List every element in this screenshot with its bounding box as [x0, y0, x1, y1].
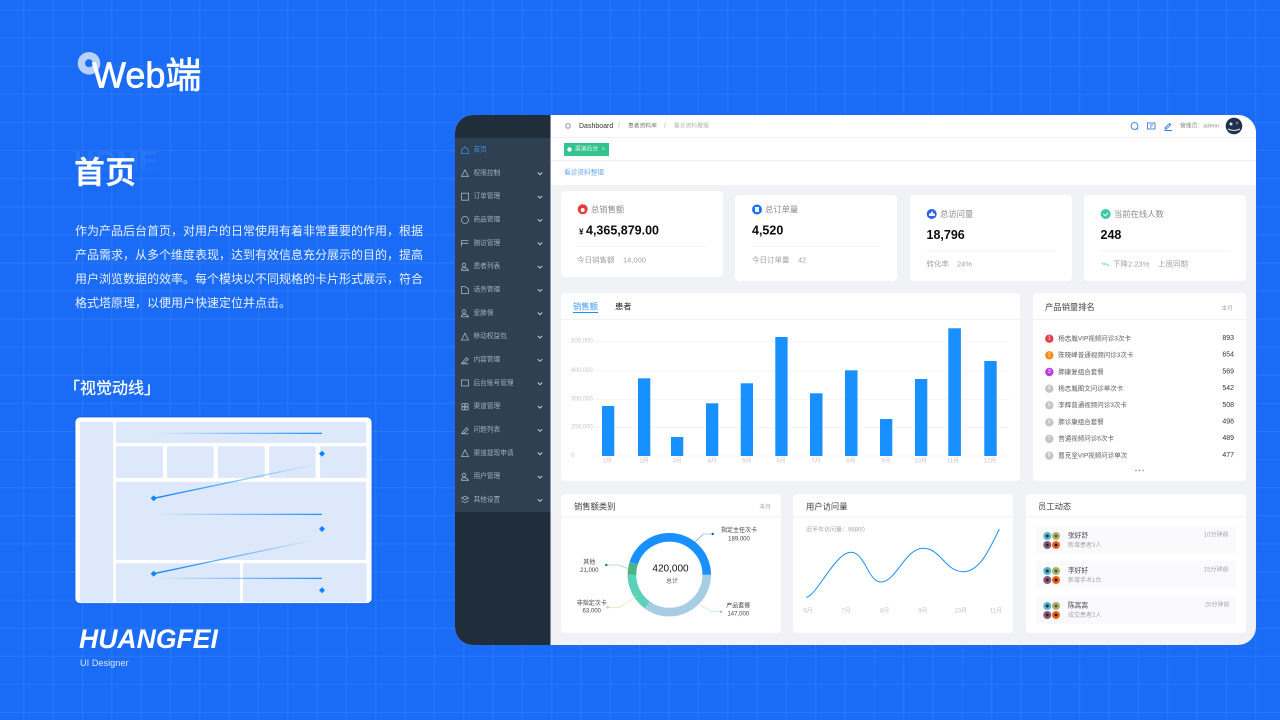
y axis labels: 200,000: [571, 424, 593, 430]
bars: [602, 328, 997, 456]
callout: 产品套餐: 147,000: [727, 612, 750, 618]
nav item: 首页: [462, 144, 487, 154]
rank row 6: 肺诊康组合套餐: [1058, 417, 1104, 426]
rank row 7: 489: [1222, 435, 1234, 442]
x axis labels: 11月: [990, 608, 1002, 615]
panel: sidebar: [455, 115, 550, 645]
panel: sales category donut: 本月: [759, 502, 771, 510]
breadcrumb: Dashboard: [579, 123, 613, 130]
chart tabs: [573, 302, 632, 313]
nav item: 其他设置: 其他设置: [474, 494, 501, 504]
rank row 6: [1045, 417, 1234, 426]
rank row 2: 陈晓峰普通视频问诊3次卡: [1058, 350, 1134, 359]
x axis labels: 9月: [918, 608, 927, 615]
nav item: 随访管理: [461, 239, 542, 246]
x axis labels: 10月: [914, 458, 927, 465]
text block: page description: 产品需求，从多个维度表现，达到有效信息充分展示的目的，提高: [75, 247, 423, 262]
x axis labels: 3月: [672, 458, 682, 465]
rank row 2: 2: [1048, 352, 1051, 358]
callout: 其他: [580, 558, 629, 574]
activity row 3: 成交患者2人: [1068, 611, 1101, 619]
callout: 指定主任次卡: [695, 526, 757, 543]
panel: dashboard mockup: [455, 115, 1256, 645]
icon: online check: [1101, 209, 1111, 219]
callout: 产品套餐: 产品套餐: [726, 602, 750, 610]
icon: orders: [752, 204, 762, 214]
donut chart: [632, 537, 707, 612]
nav item: 问题列表: [462, 424, 542, 434]
activity row 1: 张好舒: [1068, 530, 1088, 540]
rank row 2: 654: [1222, 352, 1234, 358]
rank row 7: [1045, 434, 1234, 443]
x axis labels: 8月: [880, 608, 889, 615]
rank row 8: 477: [1222, 452, 1234, 459]
x axis labels: 12月: [984, 458, 996, 465]
panel: user visits line chart: 近半年访问量：96800: [806, 526, 865, 534]
stat card: 总订单量: 42: [798, 256, 806, 264]
nav item: 商品管理: 商品管理: [474, 214, 501, 224]
icon: dashboard gear: [566, 124, 570, 128]
icon: visits: [927, 209, 937, 219]
rank row 3: 肺康复组合套餐: [1058, 367, 1104, 376]
icon: sales: [578, 204, 588, 214]
nav item: 权限控制: [462, 168, 542, 177]
breadcrumb: [580, 122, 709, 128]
rank row 2: [1045, 350, 1234, 359]
heading: 首页: [74, 146, 158, 190]
nav item: 移动权益包: [462, 331, 542, 340]
donut total: 总计: [666, 577, 678, 585]
rank row 5: 5: [1048, 402, 1051, 408]
rank row 4: 杨志胤图文问诊单次卡: [1058, 384, 1124, 392]
nav item: 订单管理: 订单管理: [474, 191, 501, 200]
avatars: [1043, 567, 1060, 584]
stat card: 当前在线人数: 下降2.23%: [1113, 258, 1150, 268]
callout: 其他: 21,000: [580, 568, 599, 574]
nav item: 爱肺保: 爱肺保: [474, 308, 494, 317]
avatar: admin: [1226, 118, 1242, 134]
chart tabs: 患者: [615, 302, 632, 312]
donut total: 420,000: [652, 564, 689, 574]
rank row 5: 李辉普通视频问诊3次卡: [1058, 400, 1127, 409]
x axis labels: 8月: [846, 458, 856, 465]
rank row 1: 杨志胤VIP视频问诊3次卡: [1058, 334, 1131, 342]
panel: product ranking: 本月: [1221, 304, 1233, 312]
tag: 渠道后台: [564, 143, 609, 156]
heading: 首页: 首页: [74, 156, 136, 190]
text block: page description: 作为产品后台首页，对用户的日常使用有着非常重要的作用，根据: [75, 223, 423, 238]
icon: edit: [1164, 124, 1172, 130]
rank row 5: 508: [1222, 402, 1234, 409]
rank row 3: 3: [1048, 369, 1051, 375]
rank row 6: 498: [1222, 418, 1234, 426]
y axis labels: [571, 339, 593, 459]
nav item: 渠道提现申请: 渠道提现申请: [474, 448, 514, 457]
panel: sales bar chart: [561, 293, 1020, 481]
nav item: 后台账号管理: [461, 379, 542, 386]
x axis labels: [602, 458, 996, 465]
nav item: 用户管理: [462, 471, 542, 480]
tag: 渠道后台: 渠道后台: [575, 144, 598, 152]
rank row 7: 普通视频问诊6次卡: [1058, 434, 1114, 442]
breadcrumb: 看诊资料整理: [674, 122, 709, 130]
more dots: [1135, 470, 1144, 471]
y axis labels: 300,000: [571, 396, 593, 402]
panel: user visits line chart: 用户访问量: [806, 502, 848, 512]
icon: search: [1131, 123, 1138, 130]
breadcrumb: 患者资料库: [628, 122, 657, 130]
nav item: 权限控制: 权限控制: [474, 168, 501, 177]
x axis labels: [803, 608, 1002, 615]
stat card: 总销售额: 今日销售额: [577, 254, 615, 264]
stat card: 总销售额: 总销售额: [591, 204, 625, 214]
nav item: 商品管理: [462, 214, 542, 224]
activity row 1: [1036, 526, 1236, 554]
nav item: 话务管理: [462, 284, 542, 294]
chart tabs: 销售额: [573, 302, 599, 312]
nav item: 用户管理: 用户管理: [474, 471, 501, 480]
flow lines: [153, 433, 322, 578]
title: Web端: Web端: [92, 54, 201, 96]
nav item: 随访管理: 随访管理: [474, 238, 501, 247]
text block: page description: 格式塔原理，以便用户快速定位并点击。: [75, 295, 291, 310]
nav item: 话务管理: 话务管理: [474, 284, 501, 294]
stat card: 总订单量: 总订单量: [765, 204, 798, 214]
callout: 非指定次卡: [577, 596, 637, 615]
activity row 1: 10分钟前: [1204, 530, 1228, 538]
nav item: 首页: 首页: [474, 144, 487, 154]
rank row 8: 曹克坚VIP视频问诊单次: [1058, 450, 1128, 459]
nav item: 其他设置: [460, 496, 542, 503]
stat card: 总订单量: 今日订单量: [752, 254, 790, 264]
icon: title ring: [78, 52, 100, 75]
rank row 5: [1045, 400, 1234, 409]
x axis labels: 4月: [707, 458, 717, 465]
nav item: 订单管理: [462, 191, 542, 200]
y axis labels: 0: [571, 453, 575, 459]
activity row 2: 15分钟前: [1204, 566, 1228, 574]
rank row 1: [1045, 334, 1234, 343]
stat card: 总销售额: 14,000: [623, 256, 646, 264]
nav item: 渠道提现申请: [462, 448, 542, 457]
x axis labels: 10月: [954, 608, 967, 615]
line series: [806, 529, 999, 597]
activity row 1: 新增患者3人: [1068, 541, 1101, 549]
rank row 6: 6: [1048, 419, 1051, 425]
activity row 3: 陈嵩嵩: [1068, 600, 1088, 610]
activity row 3: 20分钟前: [1205, 600, 1230, 608]
stat card: 当前在线人数: 上周同期: [1158, 260, 1188, 268]
breadcrumb: /: [664, 122, 666, 130]
x axis labels: 7月: [811, 458, 821, 465]
heading: 首页: HOME: [74, 146, 158, 176]
avatars: [1043, 532, 1060, 549]
diagram: visual flow wireframe: [75, 417, 372, 604]
x axis labels: 11月: [947, 458, 959, 465]
stat card: 总销售额: [561, 191, 723, 277]
nav item: 患者列表: [462, 261, 542, 270]
y axis labels: 500,000: [571, 339, 593, 345]
rank row 8: [1045, 450, 1234, 460]
activity row 2: 李好好: [1068, 566, 1088, 574]
x axis labels: 6月: [803, 608, 813, 615]
rank row 1: 893: [1222, 335, 1234, 342]
stat card: 总订单量: 4,520: [752, 224, 783, 238]
callout: 指定主任次卡: 指定主任次卡: [721, 526, 757, 534]
callout: 非指定次卡: 63,000: [583, 609, 602, 615]
nav item: 患者列表: 患者列表: [474, 261, 501, 270]
panel: top header: [551, 115, 1256, 185]
callout: 指定主任次卡: 189,000: [728, 537, 750, 543]
panel: staff activity: [1026, 494, 1246, 633]
designer name: [79, 624, 218, 668]
breadcrumb: /: [618, 122, 620, 130]
stat card: 总访问量: [910, 195, 1072, 281]
stat card: 当前在线人数: [1084, 195, 1246, 281]
avatars: [1043, 602, 1060, 619]
panel: sales category donut: [561, 494, 781, 633]
y axis labels: 400,000: [571, 368, 593, 374]
panel: sales category donut: 销售额类别: [574, 502, 616, 512]
nav item: 移动权益包: 移动权益包: [474, 331, 507, 340]
nav item: 后台账号管理: 后台账号管理: [474, 378, 514, 387]
rank row 4: 542: [1222, 385, 1234, 392]
rank row 4: [1045, 384, 1234, 393]
panel: product ranking: [1033, 293, 1246, 481]
panel: product ranking: 产品销量排名: [1045, 302, 1095, 312]
nav item: 爱肺保: [462, 308, 542, 317]
stat card: 总订单量: [735, 195, 897, 281]
panel: user visits line chart: [793, 494, 1013, 633]
nav item: 内容管理: [462, 354, 542, 364]
activity row 3: [1036, 596, 1236, 624]
panel: staff activity: 员工动态: [1038, 502, 1071, 512]
nav item: 渠道管理: 渠道管理: [474, 401, 501, 410]
rank row 3: [1045, 367, 1234, 376]
nav item: 问题列表: 问题列表: [474, 424, 501, 434]
text block: page description: 用户浏览数据的效率。每个模块以不同规格的卡片形式展示，符合: [75, 271, 423, 286]
designer name: HUANGFEI: [79, 624, 218, 654]
stat card: 总销售额: ¥: [579, 228, 584, 236]
tab: 看诊资料整理: 看诊资料整理: [564, 168, 604, 176]
callout: 产品套餐: [700, 602, 750, 618]
heading: 视觉动线: 「视觉动线」: [64, 380, 160, 398]
stat card: 总销售额: 4,365,879.00: [586, 224, 659, 238]
x axis labels: 6月: [776, 458, 786, 465]
stat card: 当前在线人数: 248: [1100, 228, 1121, 242]
designer name: UI Designer: [80, 658, 129, 668]
tag: 渠道后台: ×: [602, 146, 605, 152]
callout: 非指定次卡: 非指定次卡: [577, 599, 607, 607]
x axis labels: 7月: [841, 608, 851, 615]
stat card: 总访问量: 转化率: [926, 258, 949, 268]
text block: page description: [75, 223, 423, 310]
stat card: 总访问量: 18,796: [926, 228, 965, 242]
rank row 4: 4: [1048, 386, 1051, 392]
icon: trend down: [1102, 262, 1109, 266]
rank row 1: 1: [1048, 336, 1051, 342]
nav item: 内容管理: 内容管理: [474, 354, 501, 364]
x axis labels: 2月: [639, 458, 649, 465]
activity row 2: [1036, 561, 1236, 589]
rank row 8: 8: [1048, 453, 1051, 459]
stat card: 当前在线人数: 当前在线人数: [1114, 209, 1164, 219]
stat card: 总访问量: 24%: [957, 260, 972, 268]
stat card: 总访问量: 总访问量: [940, 209, 973, 219]
x axis labels: 1月: [602, 458, 612, 465]
rank row 3: 569: [1222, 368, 1234, 376]
nav item: 渠道管理: [462, 401, 542, 410]
rank row 7: 7: [1048, 436, 1051, 442]
icon: message: [1148, 123, 1155, 129]
x axis labels: 5月: [742, 458, 751, 465]
callout: 其他: 其他: [583, 558, 595, 566]
flow nodes: [151, 451, 325, 593]
x axis labels: 9月: [881, 458, 891, 465]
donut total: [652, 564, 689, 585]
admin label: 管理员：admin: [1180, 122, 1219, 130]
activity row 2: 新增手术1台: [1068, 576, 1101, 584]
